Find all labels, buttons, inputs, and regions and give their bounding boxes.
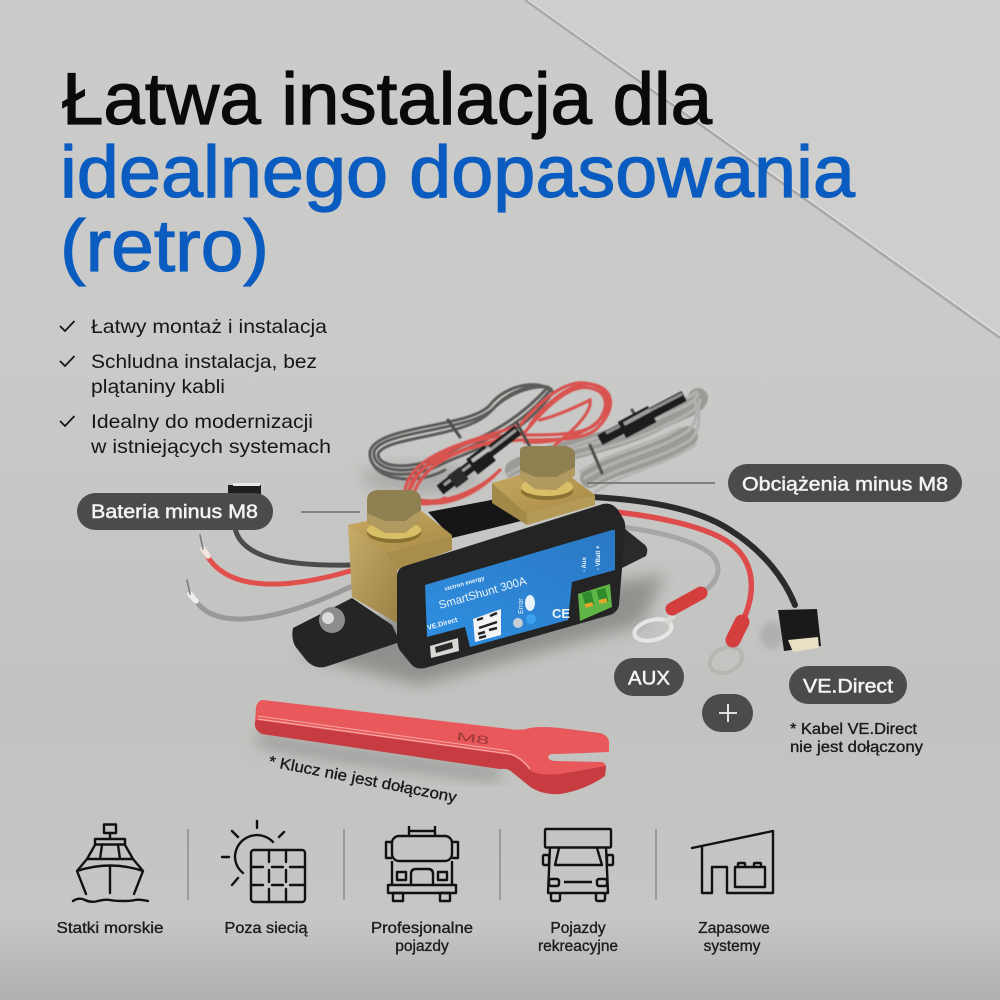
label text: VE.Direct (427, 616, 459, 632)
right wires (592, 497, 795, 625)
application: recreational vehicles (538, 829, 618, 955)
note: VE.Direct cable not included: nie jest dołączony (790, 739, 923, 756)
label text: CE (552, 606, 570, 621)
green terminal block (578, 584, 612, 621)
label: Bateria minus M8 (77, 493, 273, 530)
item: easy mounting: Łatwy montaż i instalacja (91, 316, 327, 338)
ties (448, 410, 642, 473)
icon: sun and solar panel (222, 821, 305, 902)
application: professional vehicles: Profesjonalne (371, 920, 473, 937)
application: recreational vehicles: rekreacyjne (538, 938, 618, 955)
left brass terminal (348, 490, 452, 623)
checklist (60, 316, 331, 458)
VE.Direct port (430, 638, 459, 658)
label: VE.Direct (789, 666, 907, 704)
icon: motorhome (543, 829, 613, 901)
title: Łatwa instalacja dla (62, 59, 712, 140)
title: (retro) (60, 206, 269, 287)
note: VE.Direct cable not included (790, 721, 923, 756)
fuse holder: right (600, 394, 684, 440)
item: tidy installation: plątaniny kabli (91, 376, 225, 398)
icon: truck (386, 826, 458, 901)
label: Obciążenia minus M8: Obciążenia minus M8 (742, 474, 948, 496)
wrench marking: M8 (456, 731, 490, 748)
right flange (618, 525, 647, 570)
application: professional vehicles: pojazdy (395, 938, 449, 955)
right bolt (520, 446, 575, 500)
item: ideal for retrofit (60, 411, 331, 458)
note: wrench not included: * Klucz nie jest dołączony (267, 753, 458, 806)
application: off-grid (222, 821, 308, 937)
black VE.Direct cable (592, 497, 795, 605)
black housing (397, 504, 625, 668)
terminal: AUX ring (632, 593, 701, 644)
item: ideal for retrofit: Idealny do modernizacji (91, 411, 313, 433)
red wire (200, 535, 350, 584)
label: AUX (614, 658, 684, 696)
dark grey wire loop (370, 385, 553, 479)
left bolt (367, 490, 421, 543)
base flange left (292, 598, 400, 667)
application: backup systems: Zapasowe (698, 920, 770, 937)
application: boats (56, 824, 164, 937)
dark wire (235, 528, 350, 565)
terminal: plus ring (706, 622, 746, 678)
label text: - Aux (582, 557, 588, 572)
red wire loop (405, 383, 610, 504)
application: backup systems: systemy (704, 938, 761, 955)
black bar (428, 497, 525, 538)
screw (319, 607, 345, 633)
item: ideal for retrofit: w istniejących systemach (90, 436, 331, 458)
QR code (473, 609, 501, 642)
application: boats: Statki morskie (56, 920, 164, 937)
label text: - VBatt + (596, 545, 602, 570)
label: plus (702, 694, 753, 732)
label: AUX: AUX (628, 668, 670, 690)
red wire (605, 511, 751, 625)
connector: VE.Direct plug (760, 609, 821, 652)
left wires (187, 528, 350, 619)
wrench (255, 700, 609, 794)
item: tidy installation: Schludna instalacja, bez (91, 351, 317, 373)
cable bundles behind the shunt (360, 383, 700, 504)
application: professional vehicles (371, 826, 473, 955)
shunt device (292, 446, 665, 685)
item: tidy installation (60, 351, 317, 398)
title (60, 59, 855, 287)
application: off-grid: Poza siecią (224, 920, 308, 937)
application: backup systems (692, 831, 773, 955)
label text: victron energy (444, 576, 486, 593)
connector: top-left wire end (228, 483, 261, 494)
light grey wire bundle (507, 392, 700, 492)
label text: SmartShunt 300A (438, 575, 528, 612)
label: Bateria minus M8: Bateria minus M8 (91, 501, 258, 523)
label: VE.Direct: VE.Direct (803, 676, 894, 698)
grey wire (187, 580, 350, 619)
status LEDs (513, 595, 536, 628)
title: idealnego dopasowania (60, 132, 855, 213)
label: Obciążenia minus M8 (728, 464, 962, 502)
icon: ship (73, 824, 148, 902)
right brass terminal (492, 446, 595, 525)
icon: garage with battery (692, 831, 773, 893)
blue label (425, 530, 615, 647)
fuse holder: left (440, 430, 518, 490)
grey wire (622, 527, 718, 594)
note: VE.Direct cable not included: * Kabel VE.Direct (790, 721, 918, 738)
application: recreational vehicles: Pojazdy (550, 920, 606, 937)
label text (427, 545, 602, 632)
label text: Error (518, 598, 525, 614)
